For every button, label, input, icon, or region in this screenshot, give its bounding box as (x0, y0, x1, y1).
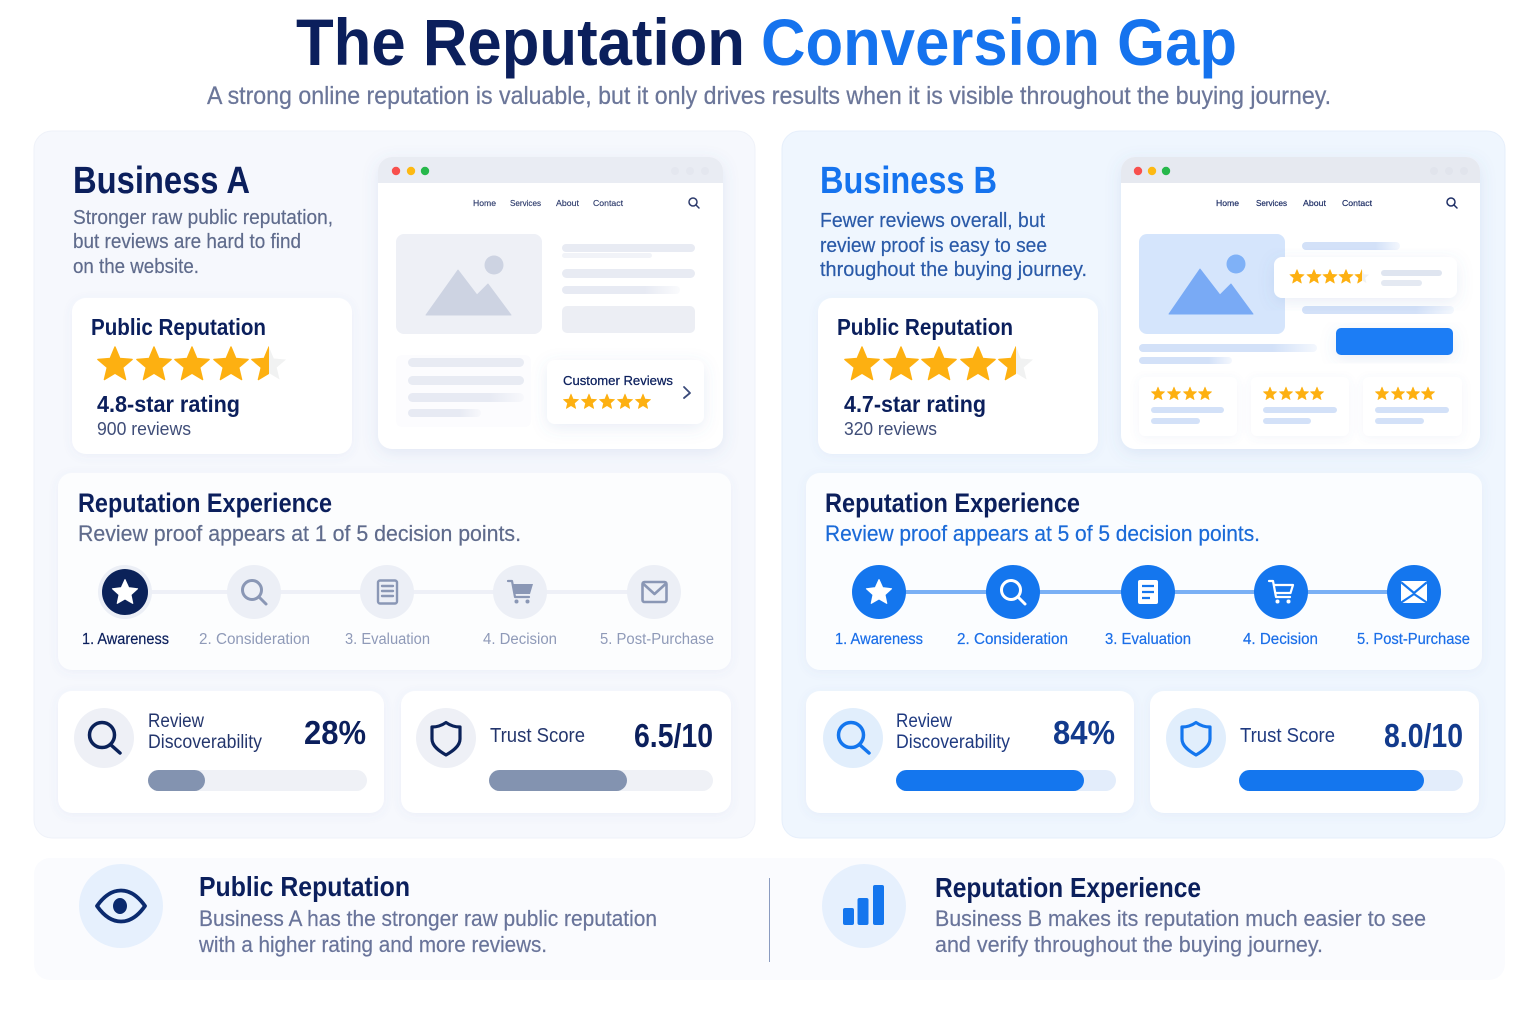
title: Conversion Gap (761, 5, 1237, 79)
summary: public reputation (198, 871, 657, 957)
step 2 consideration A (199, 565, 310, 648)
step 5 post-purchase A (600, 565, 714, 648)
summary: reputation experience: Reputation Experience (935, 872, 1201, 903)
step 5 post-purchase A: 5. Post-Purchase (600, 631, 714, 648)
browser mockup B (1121, 157, 1480, 449)
step 1 awareness B (835, 565, 923, 648)
browser mockup A: Contact (593, 198, 624, 208)
metric: trust score A: 6.5/10 (634, 717, 713, 754)
step 1 awareness B: 1. Awareness (835, 631, 923, 648)
call-to-action button (1336, 328, 1453, 355)
description: Business B: throughout the buying journey. (820, 258, 1087, 281)
browser mockup B: About (1303, 198, 1327, 208)
card: public reputation B: Public Reputation (837, 314, 1013, 340)
icon: eye (79, 864, 163, 948)
step 2 consideration B (957, 565, 1068, 648)
browser mockup B: Services (1256, 198, 1287, 208)
panel: business B (782, 131, 1505, 838)
review card 3 (1363, 377, 1462, 436)
metric: review discoverability B: 84% (1053, 714, 1115, 751)
step 4 decision A: 4. Decision (483, 631, 557, 648)
step 1 awareness A (82, 565, 169, 648)
browser mockup A: Home (473, 198, 496, 208)
metric: review discoverability B (806, 691, 1134, 813)
metric: trust score A (401, 691, 731, 813)
card: public reputation B (818, 298, 1098, 454)
card: public reputation A: 4.8-star rating (97, 391, 240, 417)
metric: review discoverability A (58, 691, 384, 813)
step 3 evaluation A (345, 565, 430, 648)
reputation experience card B (806, 473, 1482, 670)
icon: bar chart (822, 864, 906, 948)
heading: Business B: Business B (820, 160, 997, 202)
step 2 consideration A: 2. Consideration (199, 631, 310, 648)
heading: Business A: Business A (73, 160, 250, 202)
step 5 post-purchase B (1357, 565, 1470, 648)
description: Business B: review proof is easy to see (820, 234, 1047, 257)
reputation experience card A: Reputation Experience (78, 488, 332, 518)
summary: public reputation: Public Reputation (199, 871, 410, 902)
step 5 post-purchase B: 5. Post-Purchase (1357, 631, 1470, 648)
card: public reputation A (72, 298, 352, 454)
step 3 evaluation B: 3. Evaluation (1105, 631, 1191, 648)
reputation experience card A: Review proof appears at 1 of 5 decision points. (78, 521, 521, 546)
card: public reputation A: Public Reputation (91, 314, 266, 340)
subtitle: A strong online reputation is valuable, but it only drives results when it is visible throughout the buying journey. (207, 82, 1331, 110)
description: Business A: on the website. (73, 255, 199, 278)
step 1 awareness A: 1. Awareness (82, 631, 169, 648)
metric: review discoverability B: Discoverability (896, 732, 1010, 753)
step 4 decision A (483, 565, 557, 648)
summary: reputation experience: Business B makes its reputation much easier to see (935, 906, 1426, 931)
browser mockup A: About (556, 198, 580, 208)
summary: reputation experience: and verify throughout the buying journey. (935, 932, 1323, 957)
title: The Reputation (296, 5, 745, 79)
metric: review discoverability A: Discoverability (148, 732, 262, 753)
description: Business A: but reviews are hard to find (73, 230, 301, 253)
metric: review discoverability A: 28% (304, 714, 366, 751)
summary: reputation experience (935, 872, 1426, 957)
step 4 decision B: 4. Decision (1243, 631, 1318, 648)
card: public reputation B: 4.7-star rating (844, 391, 986, 417)
description: Business A (73, 206, 333, 278)
step 4 decision B (1243, 565, 1318, 648)
metric: review discoverability A: Review (148, 711, 204, 732)
metric: trust score B: Trust Score (1240, 725, 1335, 747)
browser mockup B: Home (1216, 198, 1239, 208)
description: Business B (820, 209, 1087, 281)
title (296, 5, 1237, 79)
panel: business A (34, 131, 755, 838)
metric: trust score B: 8.0/10 (1384, 717, 1463, 754)
reputation experience card A (58, 473, 731, 670)
card: public reputation B: 320 reviews (844, 419, 937, 439)
description: Business A: Stronger raw public reputation, (73, 206, 333, 229)
card: public reputation A: 900 reviews (97, 419, 191, 439)
reputation experience card B: Reputation Experience (825, 488, 1080, 518)
browser mockup A (378, 157, 723, 449)
step 3 evaluation A: 3. Evaluation (345, 631, 430, 648)
floating rating card (1274, 257, 1457, 298)
customer reviews card: Customer Reviews (563, 373, 673, 388)
browser mockup B: Contact (1342, 198, 1373, 208)
summary: public reputation: Business A has the stronger raw public reputation (199, 906, 657, 931)
review card 2 (1251, 377, 1349, 436)
summary: public reputation: with a higher rating and more reviews. (198, 932, 547, 957)
step 2 consideration B: 2. Consideration (957, 631, 1068, 648)
browser mockup A: Services (510, 198, 541, 208)
metric: trust score A: Trust Score (490, 725, 585, 747)
star rating B (845, 347, 1033, 380)
review card 1 (1139, 377, 1237, 436)
description: Business B: Fewer reviews overall, but (820, 209, 1045, 232)
customer reviews card (547, 360, 704, 424)
metric: trust score B (1150, 691, 1479, 813)
metric: review discoverability B: Review (896, 711, 952, 732)
reputation experience card B: Review proof appears at 5 of 5 decision points. (825, 521, 1260, 546)
step 3 evaluation B (1105, 565, 1191, 648)
bottom summary band (34, 858, 1505, 980)
star rating A (98, 347, 286, 380)
